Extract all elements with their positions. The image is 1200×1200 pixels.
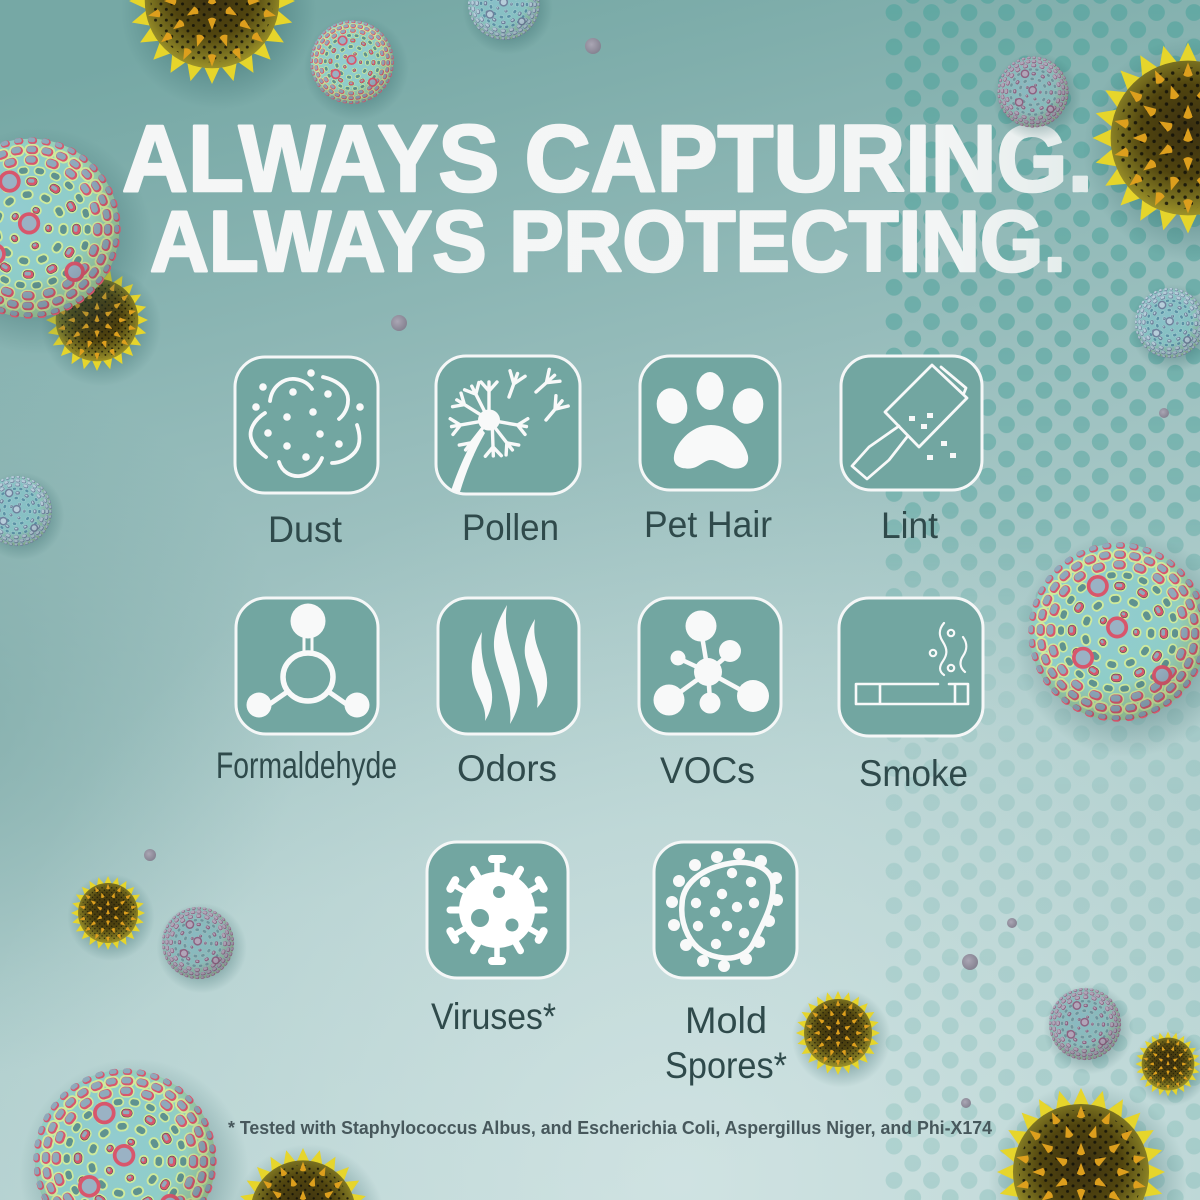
item: Smoke	[839, 598, 983, 794]
icon: lint roller	[852, 365, 967, 479]
item: Lint	[841, 356, 982, 546]
icon: VOC molecule	[654, 610, 769, 716]
icon: formaldehyde molecule	[246, 604, 370, 718]
item: VOCs	[639, 598, 781, 791]
title: ALWAYS CAPTURING.	[122, 106, 1093, 212]
item: Pollen: Pollen	[462, 507, 559, 548]
icon: dust	[251, 369, 364, 476]
item: Formaldehyde	[216, 598, 397, 786]
icon: mold spore	[666, 848, 783, 972]
icon: cigarette	[856, 623, 968, 704]
footnote: * Tested with Staphylococcus Albus, and Escherichia Coli, Aspergillus Niger, and Phi-X174	[228, 1117, 993, 1138]
item: Dust	[235, 357, 378, 550]
item: Smoke: Smoke	[859, 753, 968, 794]
item: Odors: Odors	[457, 748, 557, 789]
item: VOCs: VOCs	[660, 750, 755, 791]
item: Viruses	[427, 842, 568, 1037]
item: Pet Hair: Pet Hair	[644, 504, 772, 545]
icon: paw	[652, 372, 768, 469]
item: Mold Spores: Mold	[685, 1000, 767, 1041]
title	[122, 106, 1093, 290]
item: Lint: Lint	[881, 505, 939, 546]
icon: odor waves	[472, 605, 547, 724]
item: Formaldehyde: Formaldehyde	[216, 745, 397, 786]
icon: dandelion	[450, 369, 568, 492]
halftone dot pattern	[885, 0, 1200, 1200]
item: Pollen	[436, 356, 580, 548]
icon: virus	[450, 859, 544, 961]
item: Pet Hair	[640, 356, 780, 545]
item: Dust: Dust	[268, 509, 343, 550]
item: Viruses: Viruses*	[431, 996, 556, 1037]
item: Odors	[438, 598, 579, 789]
title: ALWAYS PROTECTING.	[150, 194, 1066, 290]
item: Mold Spores: Spores*	[665, 1045, 787, 1086]
item: Mold Spores	[654, 842, 797, 1086]
particle over title	[992, 53, 1081, 142]
